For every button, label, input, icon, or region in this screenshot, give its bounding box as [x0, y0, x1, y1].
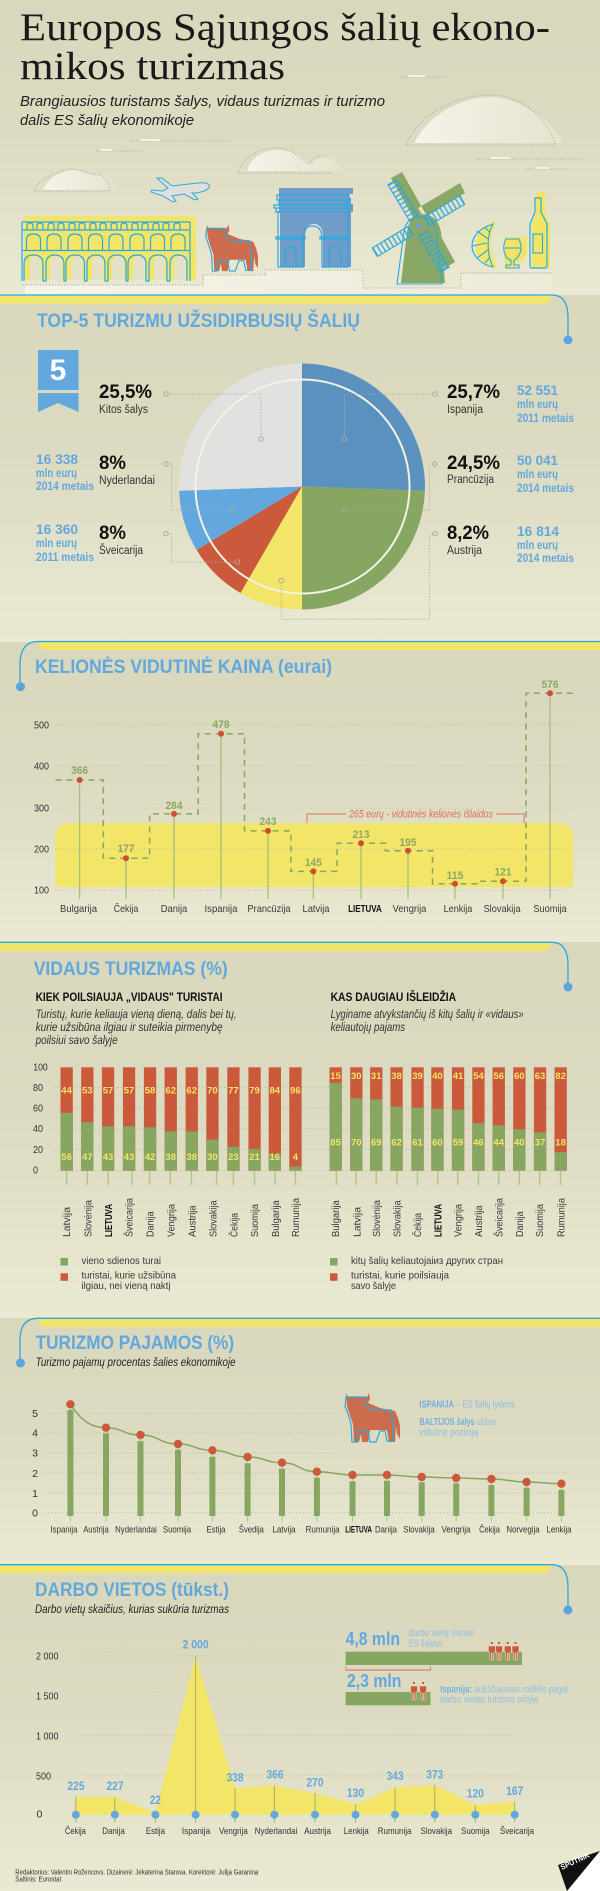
chart: left stacked bars: 53 [82, 1086, 93, 1096]
text block: left domestic: KIEK POILSIAUJA „VIDAUS" TURISTAI [36, 992, 223, 1004]
chart: left stacked bars: 70 [207, 1086, 218, 1096]
country labels: Latvija [302, 903, 330, 915]
axis labels: 0 [32, 1508, 38, 1520]
section band: domestic tourism [0, 942, 572, 992]
values: 284 [166, 800, 183, 812]
axis labels: 400 [34, 760, 49, 772]
chart: left stacked bars: 44 [61, 1086, 73, 1096]
axis labels: 3 [32, 1448, 38, 1460]
country labels: Slovakija [403, 1525, 435, 1536]
text block: right domestic [331, 991, 524, 1034]
average callout [307, 809, 524, 823]
values: 243 [260, 816, 276, 828]
legend: left: vieno sdienos turai [82, 1255, 161, 1267]
chart: right stacked bars: 40 [432, 1071, 443, 1082]
country labels: Nyderlandai [115, 1525, 157, 1536]
pie labels left [36, 381, 155, 564]
chart: left rotated labels: Rumunija [290, 1198, 302, 1237]
chart: right stacked bars [330, 1067, 567, 1185]
chart: right rotated labels: Suomija [534, 1204, 546, 1237]
chart: left rotated labels: Latvija [61, 1207, 73, 1237]
dots [72, 1811, 519, 1819]
axis labels: 1 000 [36, 1730, 59, 1742]
chart: right stacked bars: 61 [412, 1138, 423, 1148]
clouds [34, 76, 584, 191]
country labels: Austrija [83, 1525, 109, 1536]
logo: Sputnik [558, 1850, 600, 1891]
heading: domestic tourism: VIDAUS TURIZMAS (%) [34, 959, 228, 980]
chart: right stacked bars: 70 [351, 1138, 362, 1148]
connectors [164, 392, 437, 619]
pie labels right: mln eurų [517, 469, 558, 481]
axis labels: 1 [32, 1488, 38, 1500]
callout: EU jobs comparison: darbo vietų visose [409, 1627, 474, 1639]
chart: right rotated labels: Austrija [473, 1205, 485, 1237]
pie labels right: 2011 metais [517, 413, 574, 425]
text block: left domestic: Turistų, kurie keliauja vieną dieną, dalis bei tų, [36, 1009, 237, 1021]
icon: bull 2 [345, 1393, 400, 1442]
pie labels left: 16 360 [36, 521, 78, 537]
callout: EU jobs comparison: Ispanija: aukščiausias rodiklis pagal [440, 1684, 568, 1696]
country labels: Čekija [479, 1525, 500, 1536]
country labels: Rumunija [306, 1525, 340, 1536]
axis labels: 300 [34, 802, 49, 814]
pie labels right: 25,7% [447, 381, 500, 403]
country labels: Slovakija [484, 903, 521, 915]
country labels: Suomija [533, 903, 567, 915]
chart: right stacked bars: 56 [493, 1071, 504, 1082]
stems [70, 1404, 561, 1522]
country labels: Ispanija [50, 1525, 78, 1536]
icon: ribbon number 5 [38, 350, 78, 412]
chart: average trip price [34, 679, 573, 915]
area [76, 1656, 515, 1815]
chart: right stacked bars: 82 [555, 1071, 566, 1082]
country labels: Latvija [272, 1525, 296, 1536]
values: 2 000 [183, 1638, 209, 1652]
icon: people [410, 1642, 519, 1700]
pie labels right: Austrija [447, 545, 483, 557]
values: 167 [506, 1784, 523, 1798]
chart: tourism income [32, 1400, 572, 1536]
country labels: Vengrija [393, 903, 426, 915]
average band [56, 823, 573, 887]
country labels: Lenkija [344, 1826, 369, 1837]
icon: ground steps [22, 270, 552, 295]
chart: left stacked bars: 57 [124, 1086, 134, 1096]
subtitle: dalis ES šalių ekonomikoje [20, 112, 194, 129]
panel: top-5 background [0, 295, 600, 642]
country labels: Suomija [461, 1826, 490, 1837]
chart: left rotated labels: Slovakija [207, 1200, 219, 1237]
dots [66, 1400, 566, 1488]
axis labels [34, 720, 49, 896]
chart: right rotated labels: Latvija [351, 1207, 363, 1237]
bars [67, 1410, 564, 1516]
chart: left rotated labels: LIETUVA [103, 1204, 115, 1237]
pie labels left: Kitos šalys [99, 404, 148, 416]
chart: left stacked bars: 57 [103, 1086, 113, 1096]
values [68, 1638, 523, 1807]
logo: Sputnik: SPUTNIK [559, 1850, 591, 1872]
pie chart [179, 364, 425, 610]
country labels: Šveicarija [500, 1826, 535, 1837]
callout: Spain and Baltics: ISPANIJA – ES šalių lyderis [419, 1398, 515, 1410]
values: 338 [226, 1771, 244, 1785]
country labels: Estija [206, 1525, 226, 1536]
chart: right stacked bars: 38 [391, 1071, 402, 1082]
stems [76, 1656, 515, 1823]
country labels: Ispanija [182, 1826, 211, 1837]
panel: domestic tourism background [0, 942, 600, 1318]
chart: left stacked bars: 30 [207, 1152, 218, 1163]
chart: left stacked bars: 38 [186, 1152, 197, 1163]
legend: right [330, 1255, 503, 1292]
values: 115 [446, 870, 464, 882]
values: 225 [68, 1779, 85, 1793]
pie labels left: 2014 metais [36, 481, 94, 493]
chart: right stacked bars: 41 [453, 1071, 464, 1082]
chart: left stacked bars: 43 [103, 1152, 113, 1163]
chart: right rotated labels: Bulgarija [330, 1200, 342, 1237]
pie labels left: 2011 metais [36, 552, 94, 564]
country labels: Vengrija [442, 1525, 471, 1536]
axis: domestic bars: 60 [33, 1102, 43, 1114]
axis: domestic bars: 20 [33, 1144, 43, 1156]
pie labels left: 8% [99, 522, 126, 544]
axis labels: 5 [32, 1408, 38, 1420]
country labels: Čekija [114, 902, 138, 915]
pie labels right: 50 041 [517, 452, 558, 468]
country labels: Vengrija [219, 1826, 248, 1837]
chart: right rotated labels: Šveicarija [492, 1198, 505, 1237]
chart: right stacked bars: 62 [391, 1138, 402, 1148]
country labels: LIETUVA [345, 1525, 372, 1536]
panel: trip price background [0, 642, 600, 942]
chart: left rotated labels: Šveicarija [123, 1198, 136, 1237]
country labels: Norvegija [506, 1525, 540, 1536]
trend curve [70, 1404, 561, 1484]
values: 213 [352, 829, 370, 841]
text block: right domestic: keliautojų pajams [331, 1022, 405, 1034]
section band: jobs [0, 1565, 572, 1614]
stems [80, 693, 550, 899]
values: 227 [106, 1779, 124, 1793]
chart: right stacked bars: 46 [473, 1138, 484, 1148]
panel: tourism income background [0, 1318, 600, 1565]
callout: EU jobs comparison: darbo vietas turizmo srityje [440, 1694, 539, 1706]
pie labels right: Ispanija [447, 404, 484, 416]
heading: jobs: DARBO VIETOS (tūkst.) [35, 1580, 229, 1601]
callout: Spain and Baltics [419, 1398, 515, 1438]
icon: plane [151, 178, 210, 202]
chart: right stacked bars: 30 [351, 1071, 362, 1082]
country labels [65, 1826, 535, 1837]
values: 22 [150, 1793, 161, 1807]
axis: domestic bars: 80 [33, 1082, 43, 1094]
chart: right stacked bars: 40 [514, 1138, 525, 1148]
chart: right stacked bars: 44 [493, 1138, 505, 1148]
pie labels right: mln eurų [517, 540, 558, 552]
pie labels left: mln eurų [36, 538, 77, 550]
legend: left: turistai, kurie užsibūna [82, 1270, 176, 1282]
pie labels right: 8,2% [447, 522, 489, 544]
chart: left stacked bars: 43 [124, 1152, 134, 1163]
values: 120 [467, 1787, 484, 1801]
values: 130 [347, 1786, 364, 1800]
chart: left rotated labels: Vengrija [165, 1204, 177, 1237]
callout: EU jobs comparison: 2,3 mln [347, 1671, 401, 1691]
legend: left: ilgiau, nei vieną naktį [82, 1280, 170, 1292]
chart: right rotated labels: Slovakija [392, 1200, 404, 1237]
pie labels right: 2014 metais [517, 553, 574, 565]
country labels: Bulgarija [60, 903, 97, 915]
icon: colosseum [22, 216, 196, 281]
footer credits [15, 1870, 258, 1883]
icon: windmill [372, 172, 465, 284]
values: 121 [494, 866, 512, 878]
country labels: Suomija [163, 1525, 192, 1536]
chart: left stacked bars: 4 [293, 1152, 299, 1163]
country labels: Ispanija [204, 903, 238, 915]
pie labels right: 16 814 [517, 523, 559, 539]
dots [77, 690, 553, 887]
chart: left stacked bars: 96 [290, 1086, 301, 1096]
pie labels right: mln eurų [517, 399, 558, 411]
chart: left stacked bars: 42 [145, 1152, 155, 1163]
icon: wine glass [504, 237, 527, 268]
pie labels left: Nyderlandai [99, 475, 155, 487]
chart: left stacked bars [60, 1067, 302, 1185]
chart: right stacked bars: 18 [555, 1138, 566, 1148]
country labels: Danija [102, 1826, 125, 1837]
chart: left rotated labels: Danija [144, 1211, 156, 1237]
axis: domestic bars: 0 [33, 1164, 38, 1176]
step line [56, 693, 573, 884]
text block: left domestic: poilsiui savo šalyje [35, 1035, 118, 1047]
icon: bull [206, 225, 258, 271]
chart: left stacked bars: 77 [228, 1086, 239, 1096]
values: 373 [426, 1768, 444, 1782]
axis labels: 2 [32, 1468, 38, 1480]
chart: right stacked bars: 85 [330, 1138, 342, 1148]
chart: jobs [36, 1638, 535, 1837]
country labels: Lenkija [546, 1525, 572, 1536]
values [71, 679, 558, 882]
values: 343 [386, 1769, 404, 1783]
legend: right: savo šalyje [351, 1280, 396, 1292]
chart: left stacked bars: 21 [249, 1152, 260, 1163]
values: 478 [212, 719, 230, 731]
chart: left rotated labels: Austrija [186, 1205, 198, 1237]
chart: right rotated labels: Čekija [411, 1213, 424, 1237]
country labels: Lenkija [444, 903, 472, 915]
chart: left stacked bars: 62 [186, 1086, 197, 1096]
chart: left stacked bars: 16 [270, 1152, 280, 1163]
callout: EU jobs comparison: ES šalyse [409, 1637, 442, 1649]
heading: top-5: TOP-5 TURIZMU UŽSIDIRBUSIŲ ŠALIŲ [37, 310, 360, 332]
chart: left rotated labels: Slovėnija [82, 1200, 94, 1237]
chart: right stacked bars: 60 [432, 1138, 443, 1148]
pie labels right: Prancūzija [447, 474, 495, 486]
average callout: 265 eurų - vidutinės kelionės išlaidos [348, 809, 493, 821]
panel: header background [0, 0, 600, 296]
subtitle [20, 93, 385, 129]
subtitle: tourism income: Turizmo pajamų procentas šalies ekonomikoje [36, 1357, 236, 1369]
country labels: Prancūzija [248, 903, 291, 915]
chart: left stacked bars: 58 [145, 1086, 155, 1096]
axis: domestic bars [33, 1062, 572, 1176]
axis labels: 500 [36, 1771, 51, 1783]
chart: left stacked bars: 79 [249, 1086, 260, 1096]
text block: left domestic [35, 992, 237, 1047]
axis labels: 4 [32, 1428, 38, 1440]
chart: left rotated labels: Suomija [249, 1204, 261, 1237]
title: mikos turizmas [20, 45, 285, 88]
values: 195 [400, 837, 416, 849]
chart: left stacked bars: 38 [165, 1152, 176, 1163]
country labels [50, 1525, 572, 1536]
pie labels right [447, 381, 574, 565]
subtitle: jobs: Darbo vietų skaičius, kurias sukūria turizmas [35, 1604, 229, 1616]
icon: bottle [530, 192, 550, 268]
country labels [60, 902, 567, 915]
pie labels left: 25,5% [99, 381, 152, 403]
legend: left [60, 1255, 176, 1292]
chart: right rotated labels: Danija [514, 1211, 526, 1237]
axis labels: 200 [34, 844, 49, 856]
chart: left rotated labels: Čekija [227, 1213, 240, 1237]
chart: right rotated labels: Rumunija [556, 1198, 568, 1237]
footer credits: Šaltinis: Eurostat [15, 1874, 61, 1883]
icon: ribbon number 5: 5 [50, 354, 66, 387]
chart: left stacked bars: 23 [228, 1152, 239, 1163]
chart: right stacked bars: 39 [412, 1071, 423, 1082]
icon: triumphal arch [274, 188, 353, 267]
chart: right stacked bars: 15 [330, 1071, 342, 1082]
chart: right stacked bars: 54 [473, 1071, 484, 1082]
country labels: Rumunija [378, 1826, 412, 1837]
chart: left stacked bars: 47 [82, 1152, 93, 1163]
text block: right domestic: Lyginame atvykstančių iš kitų šalių ir «vidaus» [331, 1009, 524, 1021]
section band: top-5 [0, 295, 572, 344]
icon: croissant [472, 221, 498, 268]
country labels: Danija [375, 1525, 398, 1536]
chart: left stacked bars: 56 [61, 1152, 72, 1163]
values: 366 [71, 765, 88, 777]
country labels: Čekija [65, 1826, 86, 1837]
axis labels: 0 [36, 1809, 42, 1821]
pie labels right: 2014 metais [517, 483, 574, 495]
axis labels: 2 000 [36, 1651, 59, 1663]
text block: left domestic: kurie užsibūna ilgiau ir suteikia pirmenybę [36, 1022, 223, 1034]
heading: trip price: KELIONĖS VIDUTINĖ KAINA (eurai) [35, 657, 332, 678]
pie labels right: 52 551 [517, 382, 558, 398]
title [20, 6, 550, 88]
values: 366 [266, 1768, 284, 1782]
axis labels [36, 1651, 59, 1821]
values: 177 [118, 843, 134, 855]
pie labels right: 24,5% [447, 452, 500, 474]
panel: jobs background [0, 1565, 600, 1891]
axis labels: 500 [34, 720, 49, 732]
chart: right rotated labels: LIETUVA [432, 1204, 444, 1237]
country labels: Danija [161, 903, 187, 915]
pie labels left: 16 338 [36, 451, 78, 467]
country labels: Švedija [239, 1525, 264, 1536]
country labels: Nyderlandai [255, 1826, 297, 1837]
chart: right stacked bars: 69 [371, 1138, 381, 1148]
callout: Spain and Baltics: vidutinę poziciją [419, 1426, 478, 1438]
title: Europos Sąjungos šalių ekono- [20, 6, 550, 49]
subtitle: Brangiausios turistams šalys, vidaus turizmas ir turizmo [20, 93, 385, 110]
chart: right rotated labels [330, 1198, 568, 1237]
chart: right rotated labels: Slovėnija [371, 1200, 383, 1237]
chart: right stacked bars: 60 [514, 1071, 525, 1082]
legend: right: kitų šalių keliautojaiиз других стран [351, 1255, 503, 1267]
axis labels [32, 1408, 38, 1520]
values: 576 [542, 679, 558, 691]
heading: tourism income: TURIZMO PAJAMOS (%) [36, 1333, 234, 1354]
text block: right domestic: KAS DAUGIAU IŠLEIDŽIA [331, 991, 456, 1004]
pie labels left: Šveicarija [99, 544, 144, 557]
chart: left rotated labels: Bulgarija [270, 1200, 282, 1237]
country labels: Slovakija [421, 1826, 453, 1837]
values: 270 [306, 1776, 324, 1790]
pie labels left: mln eurų [36, 468, 77, 480]
pie labels left: 8% [99, 452, 126, 474]
country labels: LIETUVA [348, 903, 382, 915]
axis labels: 1 500 [36, 1691, 59, 1703]
chart: right rotated labels: Vengrija [453, 1204, 465, 1237]
section band: tourism income [16, 1318, 600, 1368]
axis labels: 100 [34, 884, 49, 896]
values: 145 [305, 857, 322, 869]
chart: right stacked bars: 63 [535, 1071, 545, 1082]
axis: domestic bars: 40 [33, 1123, 43, 1135]
chart: right stacked bars: 59 [453, 1138, 463, 1148]
chart: right stacked bars: 37 [535, 1138, 545, 1148]
callout: EU jobs comparison: 4,8 mln [346, 1629, 400, 1649]
callout: EU jobs comparison [346, 1627, 568, 1706]
chart: left stacked bars: 84 [270, 1086, 281, 1096]
chart: left stacked bars: 62 [165, 1086, 176, 1096]
country labels: Austrija [304, 1826, 332, 1837]
chart: right stacked bars: 31 [371, 1071, 382, 1082]
callout: Spain and Baltics: BALTIJOS šalys užima [419, 1416, 496, 1428]
chart: left rotated labels [61, 1198, 302, 1237]
country labels: Estija [146, 1826, 165, 1837]
section band: trip price [16, 642, 600, 691]
footer credits: Redaktorius: Valentin Rožencovs. Dizainerė: Jekaterina Starova. Korektorė: Julija Garanina [15, 1870, 258, 1877]
axis: domestic bars: 100 [33, 1062, 48, 1074]
legend: right: turistai, kurie poilsiauja [351, 1270, 449, 1282]
